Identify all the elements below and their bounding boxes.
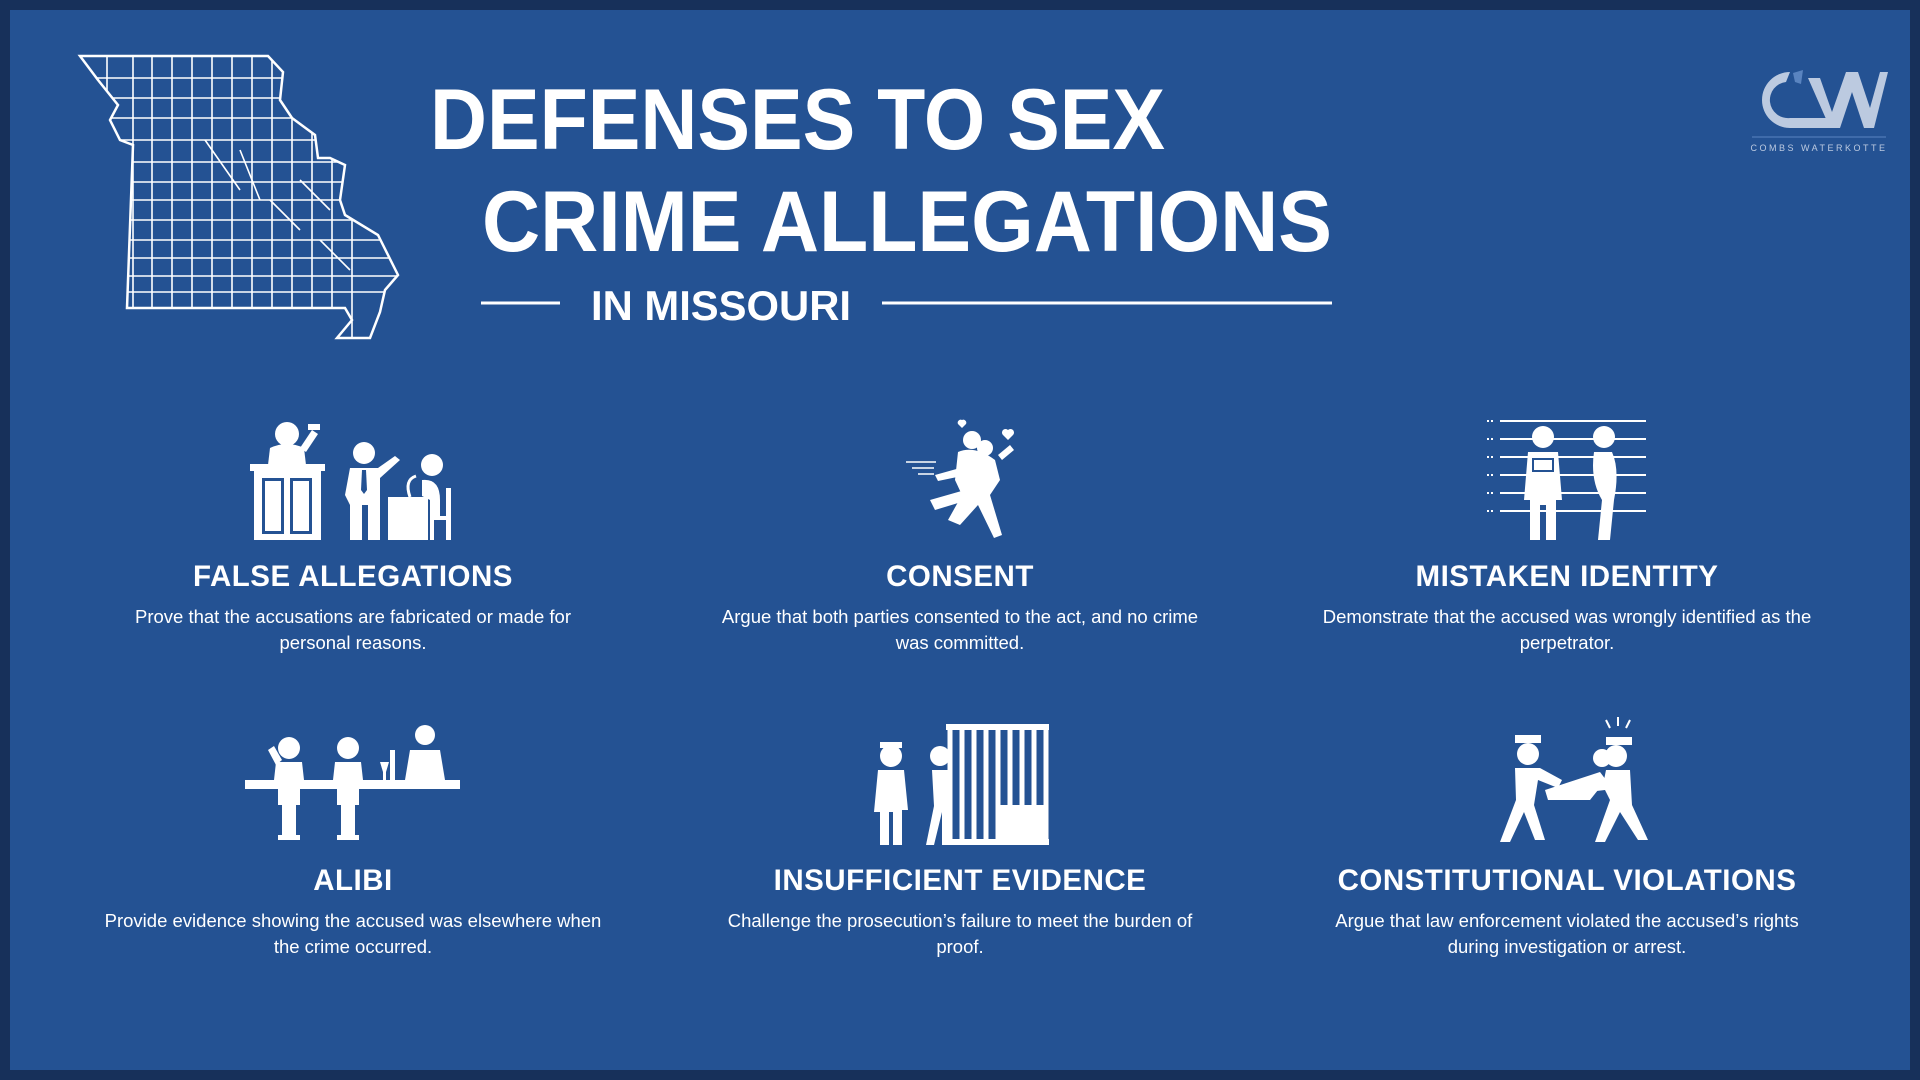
- icon: insufficient evidence: [874, 724, 1049, 845]
- text: false allegations: Prove that the accusations are fabricated or made for personal reasons.: [135, 606, 571, 653]
- icon: false allegations: [250, 422, 451, 540]
- heading: mistaken identity: MISTAKEN IDENTITY: [1416, 560, 1718, 593]
- heading: consent: CONSENT: [886, 560, 1034, 593]
- map: Missouri counties: [80, 40, 400, 340]
- subtitle: in missouri: IN MISSOURI: [591, 282, 851, 329]
- icon: consent: [906, 420, 1014, 538]
- text: insufficient evidence: Challenge the prosecution’s failure to meet the burden of proof.: [728, 910, 1192, 957]
- text: constitutional violations: Argue that law enforcement violated the accused’s rights during investigation or arrest.: [1335, 910, 1799, 957]
- title: CRIME ALLEGATIONS: [482, 174, 1332, 270]
- icon: alibi: [245, 725, 460, 840]
- logo: Combs Waterkotte: [1750, 70, 1888, 153]
- title: [430, 72, 1332, 270]
- title: DEFENSES TO SEX: [430, 72, 1165, 168]
- text: consent: Argue that both parties consented to the act, and no crime was committed.: [722, 606, 1198, 653]
- heading: insufficient evidence: INSUFFICIENT EVIDENCE: [774, 864, 1146, 897]
- heading: constitutional violations: CONSTITUTIONAL VIOLATIONS: [1338, 864, 1796, 897]
- text: mistaken identity: Demonstrate that the accused was wrongly identified as the perpetrator.: [1323, 606, 1811, 653]
- text: alibi: Provide evidence showing the accused was elsewhere when the crime occurred.: [105, 910, 601, 957]
- icon: constitutional violations: [1500, 717, 1648, 842]
- heading: alibi: ALIBI: [313, 864, 393, 897]
- icon: mistaken identity: [1487, 421, 1646, 540]
- logo: Combs Waterkotte: COMBS WATERKOTTE: [1750, 143, 1888, 153]
- heading: false allegations: FALSE ALLEGATIONS: [193, 560, 513, 593]
